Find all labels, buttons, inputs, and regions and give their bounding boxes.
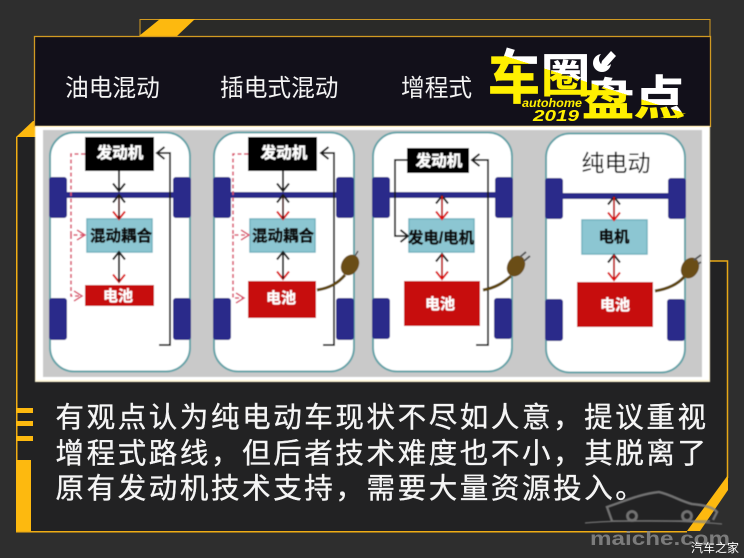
text block: commentary: 原有发动机技术支持，需要大量资源投入。 [56, 473, 646, 505]
logo: 车圈盘点 autohome 2019: autohome [522, 96, 582, 110]
watermark: maiche.com: maiche.com [590, 529, 730, 550]
diagram: hybrid car: 发动机 [97, 143, 144, 162]
diagram: hybrid car: 混动耦合 [90, 226, 152, 245]
heading: range extender: 增程式 [401, 75, 472, 102]
icon: pencil badge [593, 51, 616, 72]
diagram: plug-in hybrid car: 电池 [266, 290, 296, 307]
diagram: plug-in hybrid car: 发动机 [261, 143, 308, 162]
diagram: range-extender car: 发动机 [416, 151, 463, 170]
logo: 车圈盘点 autohome 2019: 车 [488, 46, 540, 111]
logo: 车圈盘点 autohome 2019: 盘 [582, 76, 634, 125]
logo: 车圈盘点 autohome 2019: 2019 [532, 108, 579, 125]
watermark: maiche car [585, 492, 722, 524]
logo: 车圈盘点 autohome 2019 [488, 46, 686, 125]
text block: commentary [56, 402, 709, 505]
diagram: pure electric car: 电机 [598, 228, 630, 246]
diagram: pure electric car [545, 134, 703, 372]
header band [34, 36, 710, 126]
logo: 车圈盘点 autohome 2019: 点 [634, 72, 685, 124]
logo: 车圈盘点 autohome 2019: 圈 [541, 50, 590, 102]
diagram: pure electric car: 电池 [600, 297, 630, 314]
diagram: hybrid car: 电池 [103, 288, 133, 305]
diagram: range-extender car [372, 132, 530, 372]
heading: plug-in hybrid: 插电式混动 [220, 75, 338, 102]
panel: powertrain diagrams [35, 126, 710, 382]
text block: commentary: 增程式路线，但后者技术难度也不小，其脱离了 [56, 438, 709, 470]
text block: commentary: 有观点认为纯电动车现状不尽如人意，提议重视 [56, 402, 709, 434]
diagram: plug-in hybrid car: 混动耦合 [252, 226, 314, 245]
diagram: range-extender car: 发电/电机 [408, 228, 475, 247]
diagram: pure electric car: 纯电动 [582, 150, 650, 176]
diagram: hybrid car [49, 132, 191, 372]
diagram: plug-in hybrid car [213, 132, 363, 372]
diagram: range-extender car: 电池 [425, 296, 455, 313]
heading: hybrid: 油电混动 [65, 75, 160, 102]
watermark: 汽车之家: 汽车之家 [691, 540, 739, 555]
